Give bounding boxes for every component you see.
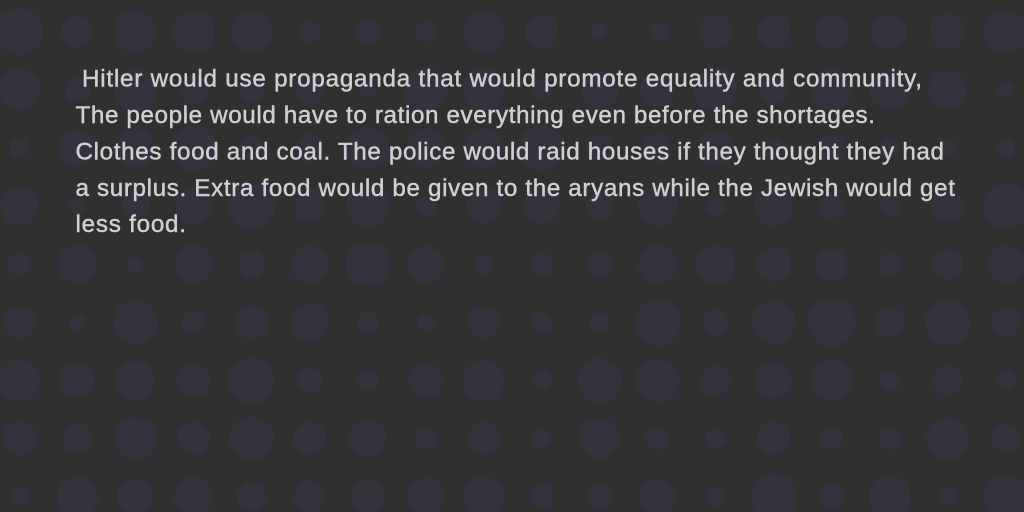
text block: paragraph: [76, 65, 955, 238]
text block: paragraph: Clothes food and coal. The police would raid houses if they thought they had: [76, 138, 944, 165]
text block: paragraph: The people would have to ration everything even before the shortages.: [76, 102, 875, 129]
text block: paragraph: less food.: [76, 211, 186, 238]
text block: paragraph: a surplus. Extra food would be given to the aryans while the Jewish would get: [76, 175, 955, 202]
text block: paragraph: Hitler would use propaganda that would promote equality and community,: [82, 65, 922, 92]
